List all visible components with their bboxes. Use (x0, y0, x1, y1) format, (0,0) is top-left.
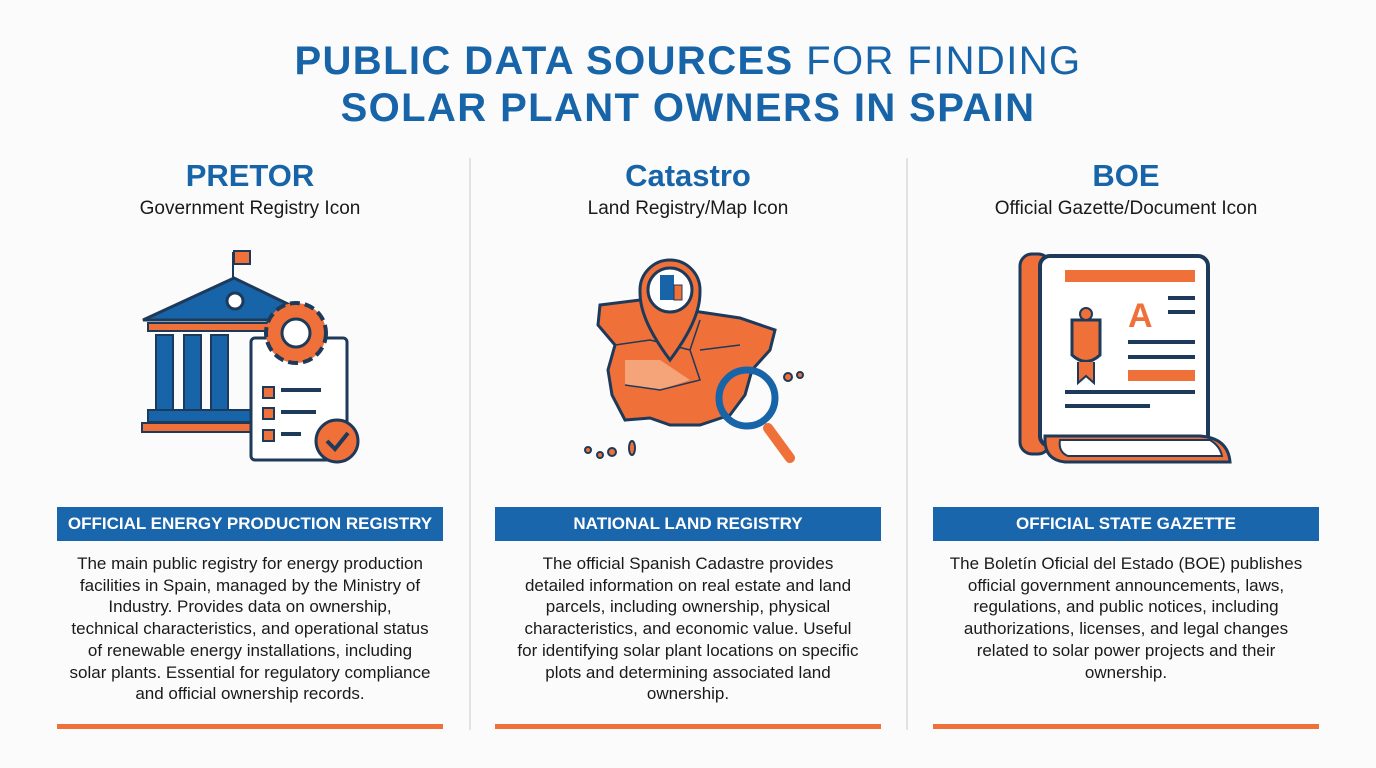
description: related to solar power projects and their (977, 641, 1275, 660)
heading: Catastro: Catastro (625, 158, 751, 193)
description: The main public registry for energy production (77, 554, 423, 573)
heading: BOE: BOE (1092, 158, 1160, 193)
description: The Boletín Oficial del Estado (BOE) publishes (950, 554, 1302, 573)
label bar (933, 507, 1319, 541)
subtitle: Official Gazette/Document Icon (995, 198, 1257, 219)
label bar: OFFICIAL STATE GAZETTE (1016, 514, 1236, 533)
panel: Catastro (495, 158, 881, 729)
label bar (57, 507, 443, 541)
title: PUBLIC DATA SOURCES FOR FINDING (294, 39, 1082, 83)
description: for identifying solar plant locations on specific (517, 641, 859, 660)
icon: gazette document (1018, 252, 1232, 464)
description (517, 554, 859, 703)
description: parcels, including ownership, physical (546, 597, 830, 616)
description: facilities in Spain, managed by the Ministry of (80, 576, 420, 595)
label bar (495, 507, 881, 541)
description: ownership. (647, 684, 729, 703)
icon: gazette document: A (1128, 297, 1153, 335)
description: and official ownership records. (135, 684, 365, 703)
description: ownership. (1085, 663, 1167, 682)
description: official government announcements, laws, (968, 576, 1284, 595)
description (950, 554, 1302, 682)
label bar: NATIONAL LAND REGISTRY (573, 514, 803, 533)
icon: map of Spain with pin and magnifier (584, 258, 804, 463)
icon: government building with checklist (141, 250, 360, 464)
title: SOLAR PLANT OWNERS IN SPAIN (341, 86, 1035, 130)
description (70, 554, 430, 703)
description: authorizations, licenses, and legal changes (964, 619, 1288, 638)
description: The official Spanish Cadastre provides (543, 554, 833, 573)
panel: PRETOR (57, 158, 443, 729)
description: regulations, and public notices, including (973, 597, 1279, 616)
description: Industry. Provides data on ownership, (108, 597, 392, 616)
panel: BOE (933, 158, 1319, 729)
description: of renewable energy installations, including (88, 641, 412, 660)
description: characteristics, and economic value. Useful (525, 619, 851, 638)
description: detailed information on real estate and land (525, 576, 851, 595)
description: solar plants. Essential for regulatory compliance (70, 663, 430, 682)
title (294, 39, 1082, 130)
subtitle: Government Registry Icon (140, 198, 360, 219)
subtitle: Land Registry/Map Icon (588, 198, 788, 219)
description: technical characteristics, and operational status (71, 619, 429, 638)
heading: PRETOR: PRETOR (186, 158, 314, 193)
label bar: OFFICIAL ENERGY PRODUCTION REGISTRY (68, 514, 432, 533)
description: plots and determining associated land (545, 663, 831, 682)
